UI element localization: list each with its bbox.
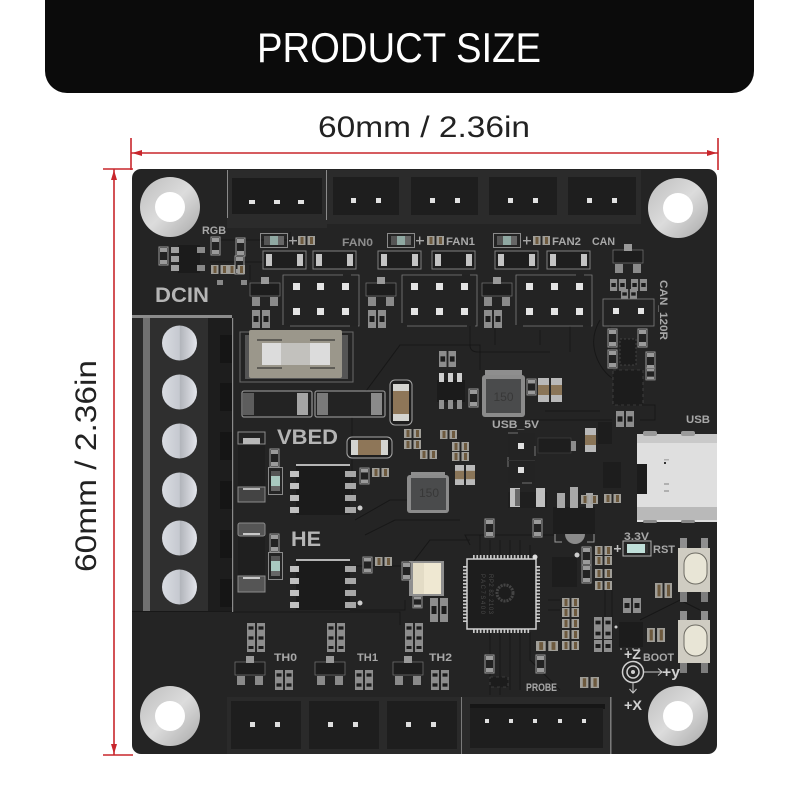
axis marker icon: [622, 646, 681, 713]
fan diodes: [263, 251, 590, 269]
circuit board: [132, 169, 717, 754]
silkscreen labels: BOOT: [643, 652, 674, 664]
silkscreen labels: PROBE: [526, 682, 557, 694]
fan transistors: [250, 244, 647, 328]
height dimension arrow: [103, 169, 133, 755]
power diodes: [242, 391, 385, 417]
silkscreen labels: CAN: [592, 236, 615, 248]
silkscreen labels: TH2: [429, 652, 452, 664]
height dimension label: 60mm / 2.36in: [70, 360, 103, 572]
3.3V LED: [614, 541, 651, 556]
RP2040 MCU: PAC7S400: [479, 574, 485, 615]
thermistor circuits: [235, 623, 449, 690]
PTC fuse: [240, 330, 353, 382]
inductor 150 lower: 150: [419, 486, 439, 500]
inductor 150 upper: 150: [493, 390, 514, 404]
bottom connectors: [227, 697, 461, 754]
mounting holes: [140, 177, 708, 746]
silkscreen labels: FAN1: [446, 236, 475, 248]
silkscreen labels: USB_5V: [492, 419, 540, 431]
width dimension label: 60mm / 2.36in: [318, 111, 530, 144]
header banner: [45, 0, 754, 93]
RGB LED driver: [159, 237, 247, 285]
inductor 150 lower: [407, 465, 475, 513]
copper traces: [210, 232, 700, 695]
buck regulator: [404, 351, 478, 461]
VBED MOSFET: [238, 432, 265, 502]
silkscreen labels: USB: [686, 414, 710, 426]
title: PRODUCT SIZE: [257, 24, 541, 71]
IMU chip: [614, 622, 643, 650]
CAN transceiver: [608, 329, 655, 427]
axis marker icon: +Z: [624, 646, 641, 662]
silkscreen labels: FAN2: [552, 236, 581, 248]
silkscreen labels: VBED: [277, 426, 338, 449]
USB-C port: [637, 431, 717, 523]
silkscreen labels: DCIN: [155, 284, 209, 307]
silkscreen labels: FAN0: [342, 237, 373, 249]
probe connector: [461, 697, 612, 754]
flash chip: [552, 547, 591, 587]
width dimension arrow: [131, 138, 718, 170]
USB 5V jumper: [508, 428, 596, 483]
resistor arrays: [485, 519, 672, 688]
silkscreen labels: TH0: [274, 652, 297, 664]
silkscreen labels: [155, 225, 710, 694]
pin headers: [283, 275, 654, 326]
crystal oscillator: [402, 561, 448, 622]
axis marker icon: +y: [662, 664, 681, 681]
USB ESD chips: [581, 422, 621, 504]
board substrate: [132, 169, 717, 754]
RP2040 MCU: RP2 82 2103: [487, 574, 493, 615]
status LEDs and gate resistors: [268, 449, 282, 580]
BOOT button: [678, 611, 710, 673]
RST button: [678, 538, 710, 602]
DCIN terminal block: [132, 315, 233, 612]
silkscreen labels: 3.3V: [624, 531, 650, 543]
inductor 150 upper: [482, 370, 562, 417]
SO-8 power ICs: [290, 464, 392, 610]
silkscreen labels: HE: [291, 528, 321, 551]
HE MOSFET: [238, 522, 265, 592]
ceramic capacitors: [347, 380, 412, 458]
voltage regulator: [553, 487, 595, 544]
fan status LEDs: [260, 234, 550, 248]
top connectors: [227, 170, 641, 228]
axis marker icon: +X: [624, 697, 643, 713]
rectifier diode: [508, 488, 547, 508]
silkscreen labels: RGB: [202, 225, 226, 237]
silkscreen labels: CAN_120R: [657, 280, 669, 340]
silkscreen labels: TH1: [357, 652, 378, 664]
RP2040 MCU: [466, 554, 538, 630]
silkscreen labels: RST: [653, 544, 675, 556]
